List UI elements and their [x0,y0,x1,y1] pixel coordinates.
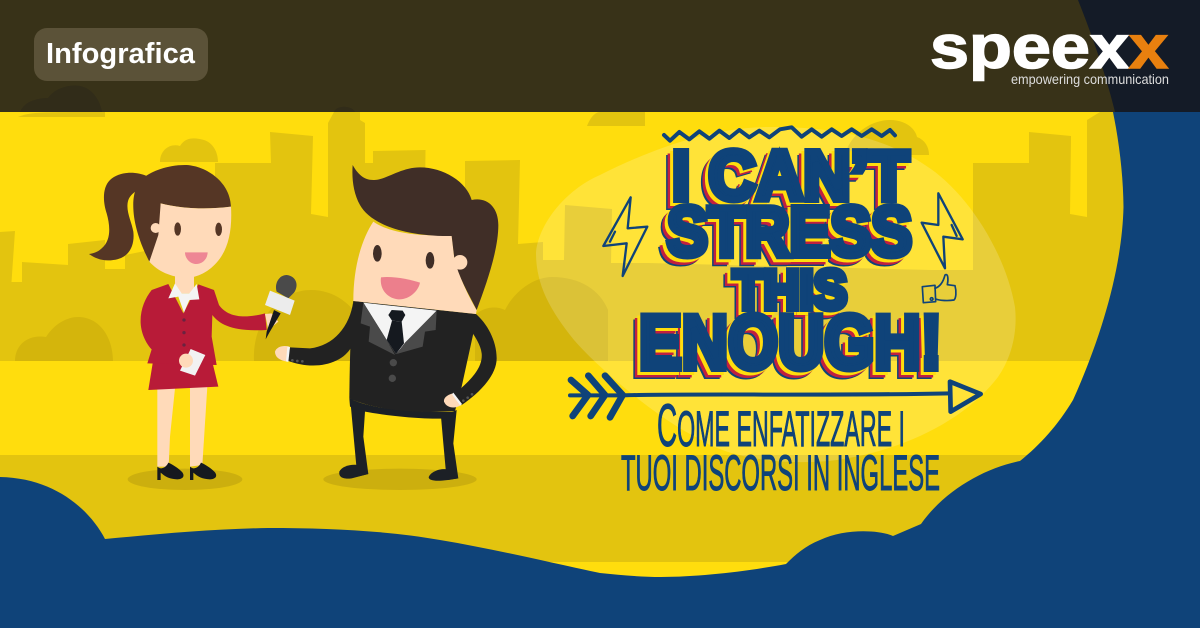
title shadow layers: I CAN’T [665,144,902,222]
ear [151,223,161,233]
title main layer: ENOUGH! [639,300,942,386]
thumbs-up icon [922,275,956,303]
illustration: female interviewer [89,165,297,490]
spotlight on title [536,127,1016,462]
ear [453,255,467,270]
eyes [174,222,222,236]
hair [352,165,498,310]
jacket [141,284,267,365]
title: I can't stress this enough: THIS [730,262,844,324]
legs [157,387,207,467]
title: I can't stress this enough: ENOUGH! [636,304,939,388]
microphone [265,275,297,339]
title: I can't stress this enough: STRESS [664,196,909,274]
tie [387,310,405,354]
ground shadow [128,469,242,490]
logo: speexx: speex x [930,13,1168,81]
mouth [381,277,420,299]
title: I can't stress this enough: THIS [728,264,842,326]
hand [179,354,193,368]
lapels [361,303,437,355]
title shadow layers: ENOUGH! [632,308,935,392]
title: I can't stress this enough: I CAN’T [669,140,906,218]
legs and feet [339,397,458,481]
zigzag line [664,127,895,141]
jacket buttons [182,318,186,347]
logo: speexx: empowering communication [1011,71,1169,87]
hand on microphone [265,313,278,330]
title main layer: THIS [733,258,847,320]
title main layer: STRESS [667,192,912,270]
background bushes [15,277,608,361]
left arm [287,301,353,366]
arrow [570,376,981,417]
title: I can't stress this enough: STRESS [662,198,906,276]
mouth [185,252,208,264]
badge: Infografica [34,28,208,81]
title shadow layers [632,144,935,392]
subtitle [621,392,940,501]
title: I can't stress this enough: ENOUGH! [634,306,936,391]
cuffs [286,347,462,406]
cuff buttons [291,359,473,402]
subtitle: COME ENFATIZZARE I [657,392,905,459]
note card [180,349,205,376]
skirt [148,363,218,390]
title: I can't stress this enough: I CAN’T [666,142,904,220]
ground shadow [323,469,477,490]
face [149,203,231,278]
top dark band [0,0,1200,112]
shirt [363,303,437,354]
hands [275,346,461,407]
title main layer: I CAN’T [672,136,909,214]
badge: Infografica: Infografica [46,38,196,70]
city skyline silhouette [0,112,1200,562]
face [353,222,477,314]
lightning bolt right [922,193,963,268]
hair [133,165,231,262]
right arm [453,314,497,405]
illustration: businessman [275,165,498,490]
jacket [349,301,476,412]
neck [175,275,194,293]
ponytail [89,173,147,260]
lightning bolt left [603,197,647,276]
shoes [157,463,216,480]
title: I can't stress this enough [632,136,942,392]
waist [349,398,456,419]
decorative icons around title [570,127,981,417]
eyes [373,245,434,269]
collar [168,283,199,313]
title main layer [639,136,942,386]
title shadow layers: STRESS [660,200,905,278]
jacket buttons [389,359,397,382]
title shadow layers: THIS [726,266,840,328]
